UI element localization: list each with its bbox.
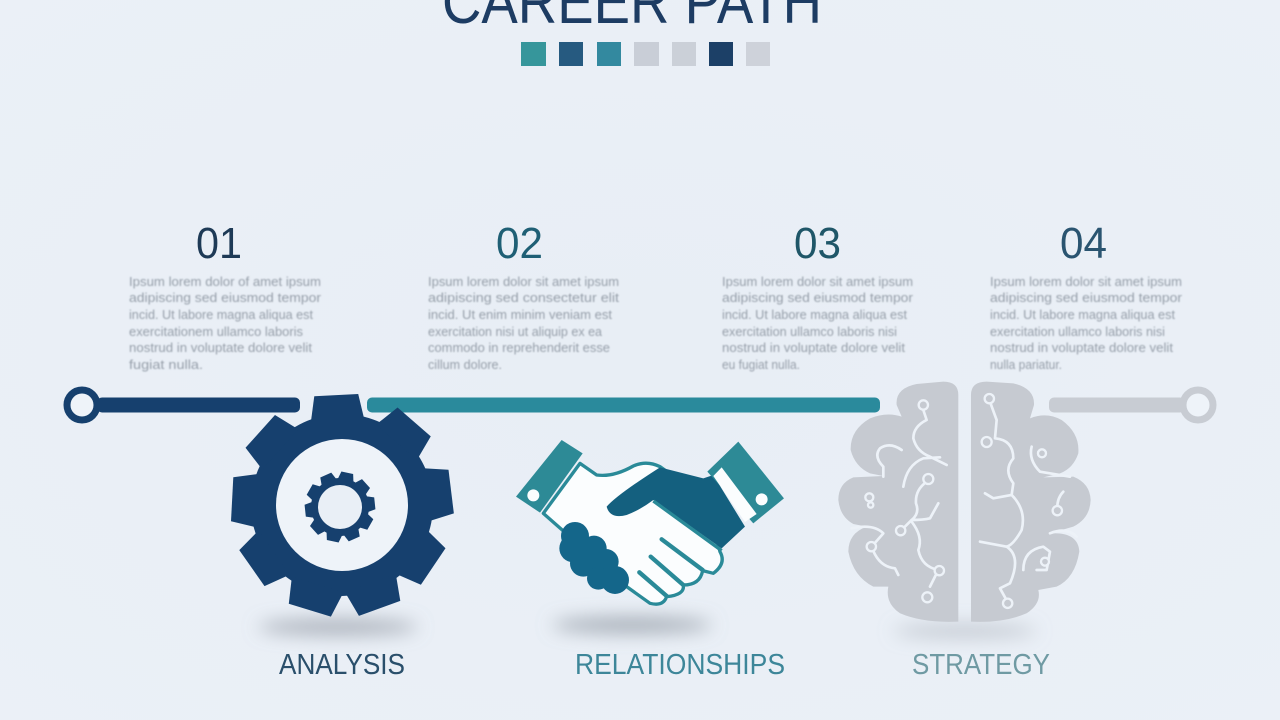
label: analysis: ANALYSIS (279, 649, 405, 681)
description 03: incid. Ut labore magna aliqua est (722, 308, 908, 322)
dark fist (559, 522, 629, 594)
number 03: 03 (794, 219, 841, 268)
description 04: Ipsum lorem dolor sit amet ipsum (990, 275, 1182, 289)
description 03 (722, 275, 913, 372)
description 01 (129, 275, 321, 372)
description 04: nulla pariatur. (990, 358, 1062, 372)
description 04: adipiscing sed eiusmod tempor (990, 291, 1182, 305)
navy segment (97, 398, 300, 412)
icon: handshake (516, 440, 784, 604)
teal segment (367, 398, 880, 412)
icon: gear (231, 394, 454, 618)
description 04: nostrud in voluptate dolore velit (990, 341, 1174, 355)
description 03: exercitation ullamco laboris nisi (722, 325, 897, 339)
step 02 text block (428, 219, 620, 372)
description 01: incid. Ut labore magna aliqua est (129, 308, 314, 322)
brain circuit lines (852, 400, 1077, 603)
description 04: exercitation ullamco laboris nisi (990, 325, 1165, 339)
description 04 (990, 275, 1182, 372)
right cuff (707, 442, 784, 523)
description 02: incid. Ut enim minim veniam est (428, 308, 613, 322)
description 03: adipiscing sed eiusmod tempor (722, 291, 913, 305)
left hemisphere (838, 382, 958, 622)
number 04: 04 (1060, 219, 1107, 268)
description 01: fugiat nulla. (129, 358, 203, 372)
description 03: nostrud in voluptate dolore velit (722, 341, 906, 355)
description 04: incid. Ut labore magna aliqua est (990, 308, 1176, 322)
description 01: exercitationem ullamco laboris (129, 325, 303, 339)
description 01: Ipsum lorem dolor of amet ipsum (129, 275, 321, 289)
step 01 text block (129, 219, 321, 372)
left cuff (516, 440, 583, 513)
description 02: adipiscing sed consectetur elit (428, 291, 620, 305)
label: strategy: STRATEGY (912, 649, 1050, 681)
timeline end node (1183, 390, 1213, 420)
icon shadows (258, 617, 1037, 638)
dark hand (607, 467, 745, 548)
description 03: eu fugiat nulla. (722, 358, 800, 372)
icon: brain (838, 382, 1091, 622)
grey segment (1049, 398, 1185, 412)
step 03 text block (722, 219, 913, 372)
small inner gear (304, 471, 376, 543)
timeline start node (67, 390, 97, 420)
description 02: cillum dolore. (428, 358, 502, 372)
right hemisphere (971, 382, 1091, 622)
description 02: exercitation nisi ut aliquip ex ea (428, 325, 602, 339)
number 01: 01 (196, 219, 242, 268)
timeline (67, 390, 1213, 420)
finger lines (639, 539, 703, 596)
description 01: nostrud in voluptate dolore velit (129, 341, 313, 355)
number 02: 02 (496, 219, 543, 268)
label: relationships: RELATIONSHIPS (575, 649, 785, 681)
brain circuit nodes (865, 394, 1062, 608)
description 02: Ipsum lorem dolor sit amet ipsum (428, 275, 619, 289)
step 04 text block (990, 219, 1182, 372)
description 03: Ipsum lorem dolor sit amet ipsum (722, 275, 913, 289)
white hand (543, 463, 722, 604)
description 01: adipiscing sed eiusmod tempor (129, 291, 321, 305)
description 02 (428, 275, 620, 372)
description 02: commodo in reprehenderit esse (428, 341, 610, 355)
decorative colour squares (521, 42, 770, 66)
